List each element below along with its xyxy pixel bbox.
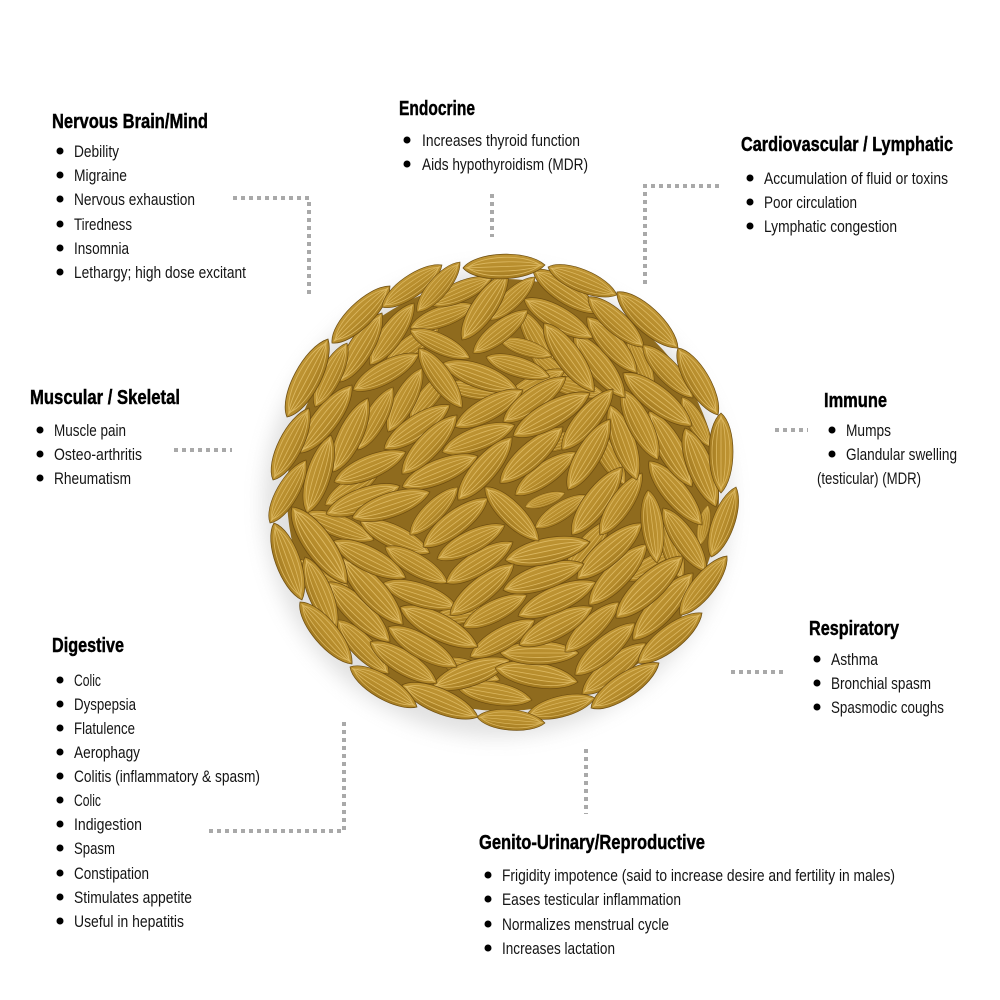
list: muscular: Osteo-arthritis	[54, 445, 142, 464]
list: digestive: Colitis (inflammatory & spasm)	[74, 767, 260, 786]
heading: endocrine: Endocrine	[399, 98, 475, 120]
list: respiratory: Spasmodic coughs	[831, 698, 944, 717]
list: genito-urinary: Normalizes menstrual cycle	[502, 915, 669, 934]
list: nervous: Migraine	[74, 166, 127, 185]
list: digestive: Dyspepsia	[74, 695, 136, 714]
connector: nervous	[233, 198, 309, 296]
list: digestive: Aerophagy	[74, 743, 140, 762]
list: digestive: Flatulence	[74, 719, 135, 738]
list: respiratory: Asthma	[831, 650, 878, 669]
list: immune	[817, 421, 957, 488]
list: nervous: Debility	[74, 142, 119, 161]
list: muscular: Muscle pain	[54, 421, 126, 440]
seed pile image	[261, 253, 746, 736]
connector: cardiovascular	[645, 186, 719, 285]
list: respiratory	[814, 650, 944, 717]
list: digestive: Constipation	[74, 864, 149, 883]
list: muscular: Rheumatism	[54, 469, 131, 488]
list: nervous: Tiredness	[74, 215, 132, 234]
list: nervous	[56, 142, 246, 282]
list: genito-urinary: Increases lactation	[502, 939, 615, 958]
list: nervous: Nervous exhaustion	[74, 190, 195, 209]
list: respiratory: Bronchial spasm	[831, 674, 931, 693]
list: cardiovascular: Lymphatic congestion	[764, 217, 897, 236]
list: cardiovascular: Accumulation of fluid or toxins	[764, 169, 948, 188]
list: muscular	[36, 421, 142, 488]
list: digestive: Spasm	[74, 839, 115, 858]
list: digestive: Colic	[74, 671, 101, 690]
connector: respiratory	[731, 670, 783, 674]
panel: muscular / skeletal	[30, 387, 180, 488]
panel: cardiovascular / lymphatic	[741, 134, 953, 236]
list: digestive	[56, 671, 260, 931]
panel: immune	[817, 390, 957, 488]
heading: digestive: Digestive	[52, 635, 124, 657]
connector: immune	[775, 428, 808, 432]
list: genito-urinary	[484, 866, 895, 958]
heading: nervous: Nervous Brain/Mind	[52, 111, 208, 133]
panel: nervous brain/mind	[52, 111, 246, 282]
connector: endocrine	[490, 194, 494, 237]
list: immune: (testicular) (MDR)	[817, 469, 921, 488]
connector: muscular	[174, 448, 232, 452]
list: cardiovascular: Poor circulation	[764, 193, 857, 212]
list: endocrine	[404, 131, 588, 174]
heading: respiratory: Respiratory	[809, 618, 900, 640]
list: immune: Mumps	[846, 421, 891, 440]
panel: endocrine	[399, 98, 588, 174]
panel: digestive	[52, 635, 260, 931]
panel: respiratory	[809, 618, 944, 717]
heading: genito-urinary: Genito-Urinary/Reproductive	[479, 832, 705, 854]
list: immune: Glandular swelling	[846, 445, 957, 464]
list: endocrine: Aids hypothyroidism (MDR)	[422, 155, 588, 174]
connector: genito-urinary	[584, 749, 588, 814]
heading: muscular: Muscular / Skeletal	[30, 387, 180, 409]
list: cardiovascular	[746, 169, 948, 236]
heading: immune: Immune	[824, 390, 887, 412]
list: digestive: Stimulates appetite	[74, 888, 192, 907]
list: nervous: Lethargy; high dose excitant	[74, 263, 246, 282]
panel: genito-urinary / reproductive	[479, 832, 895, 958]
connector: digestive	[209, 718, 344, 831]
list: genito-urinary: Eases testicular inflammation	[502, 890, 681, 909]
list: digestive: Indigestion	[74, 815, 142, 834]
heading: cardiovascular: Cardiovascular / Lymphatic	[741, 134, 953, 156]
list: nervous: Insomnia	[74, 239, 129, 258]
list: endocrine: Increases thyroid function	[422, 131, 580, 150]
list: digestive: Colic	[74, 791, 101, 810]
list: genito-urinary: Frigidity impotence (said to increase desire and fertility in males)	[502, 866, 895, 885]
list: digestive: Useful in hepatitis	[74, 912, 184, 931]
